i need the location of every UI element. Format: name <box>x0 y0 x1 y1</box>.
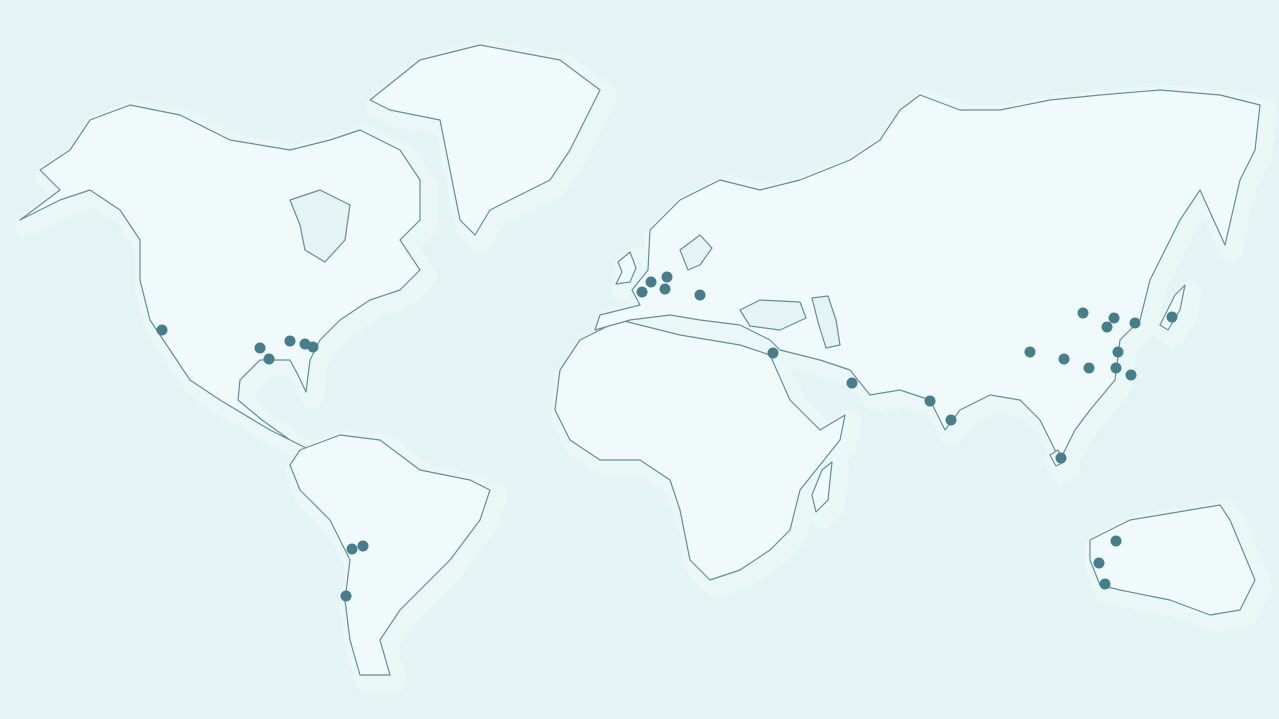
inland seas <box>290 190 840 348</box>
location dots <box>156 272 1178 602</box>
